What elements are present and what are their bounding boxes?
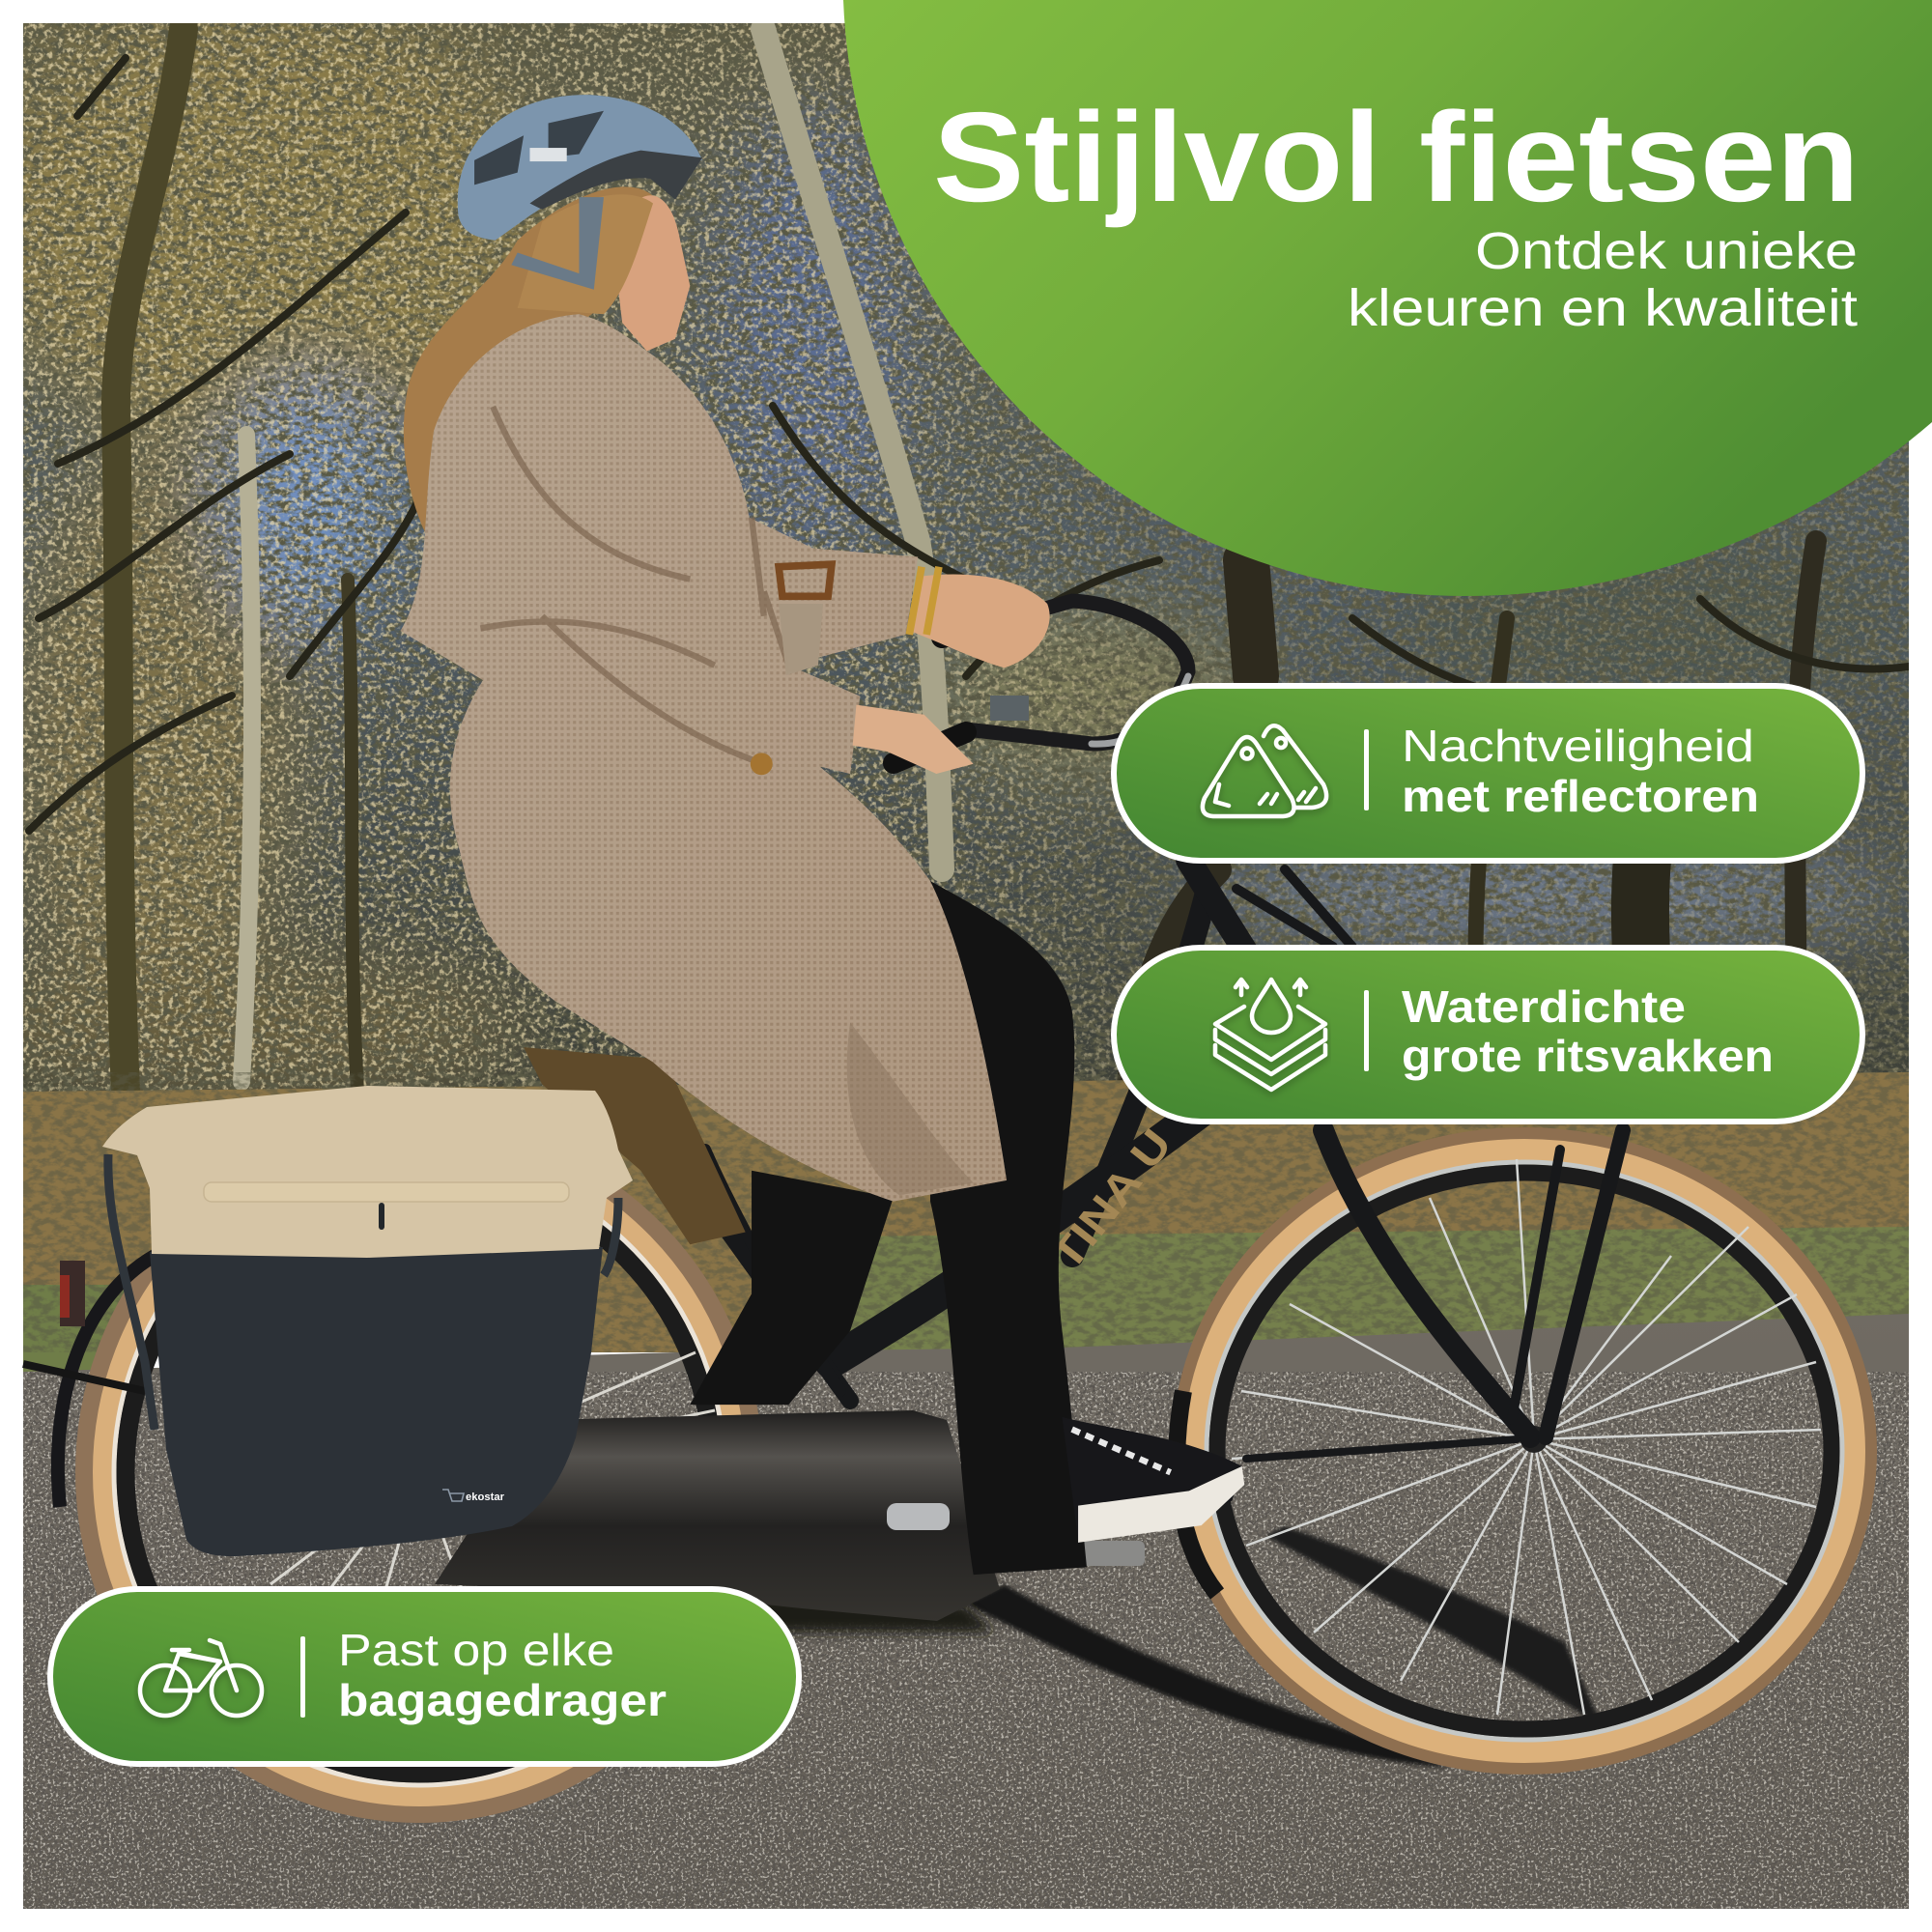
green circle xyxy=(843,0,1932,596)
bag pocket flap xyxy=(204,1182,569,1202)
bag zipper xyxy=(379,1203,384,1230)
feature text xyxy=(338,1625,667,1725)
subtitle: Ontdek unieke xyxy=(1475,222,1858,280)
chain guard xyxy=(435,1410,1000,1621)
heading panel xyxy=(843,0,1932,596)
feature pill: rack fit xyxy=(50,1589,799,1764)
trench coat xyxy=(401,314,1007,1202)
divider xyxy=(300,1636,305,1718)
subtitle: kleuren en kwaliteit xyxy=(1348,279,1858,337)
icon: water drop over layers xyxy=(1215,980,1325,1090)
rider xyxy=(401,95,1244,1575)
divider xyxy=(1364,729,1369,810)
feature text: Waterdichte xyxy=(1402,981,1686,1032)
bag logo: ekostar xyxy=(466,1492,505,1503)
handlebars xyxy=(894,601,1188,763)
canvas behind saddle xyxy=(524,1047,746,1244)
bag straps xyxy=(108,1154,618,1430)
feature pill: reflectors xyxy=(1114,686,1862,861)
hair xyxy=(404,186,659,554)
divider xyxy=(1364,990,1369,1071)
feature text xyxy=(1402,981,1774,1081)
feature text: bagagedrager xyxy=(338,1675,667,1725)
bag logo xyxy=(442,1490,505,1503)
hair side xyxy=(518,194,653,314)
feature text: Nachtveiligheid xyxy=(1402,721,1754,771)
helmet xyxy=(458,95,702,290)
trousers xyxy=(690,881,1087,1575)
feature text xyxy=(1402,721,1759,821)
subtitle xyxy=(1348,222,1858,337)
frame and fork xyxy=(628,860,1623,1459)
feature pill: waterproof xyxy=(1114,948,1862,1122)
rear wheel xyxy=(86,1132,753,1812)
title: Stijlvol fietsen xyxy=(933,86,1860,228)
feature text: grote ritsvakken xyxy=(1402,1031,1774,1081)
crank and pedal xyxy=(887,1503,1145,1566)
frame lettering: TINA U xyxy=(1042,1121,1181,1279)
road xyxy=(23,1314,1909,1909)
product: pannier bag xyxy=(102,1086,633,1556)
feature text: Past op elke xyxy=(338,1625,614,1675)
feature text: met reflectoren xyxy=(1402,771,1759,821)
hands and bracelets xyxy=(853,567,1050,774)
face and neck xyxy=(616,195,690,352)
sneaker xyxy=(1062,1417,1244,1543)
grass and reeds xyxy=(23,1072,1909,1372)
front wheel xyxy=(1177,1134,1870,1768)
icon: reflectors xyxy=(1203,725,1326,816)
bicycle xyxy=(23,601,1870,1812)
bag upper flap xyxy=(102,1086,633,1258)
bag lower body xyxy=(150,1247,603,1556)
trees and sky xyxy=(0,0,1913,1124)
icon: bicycle xyxy=(140,1640,262,1716)
rear mudguard and lamp xyxy=(23,1256,155,1507)
